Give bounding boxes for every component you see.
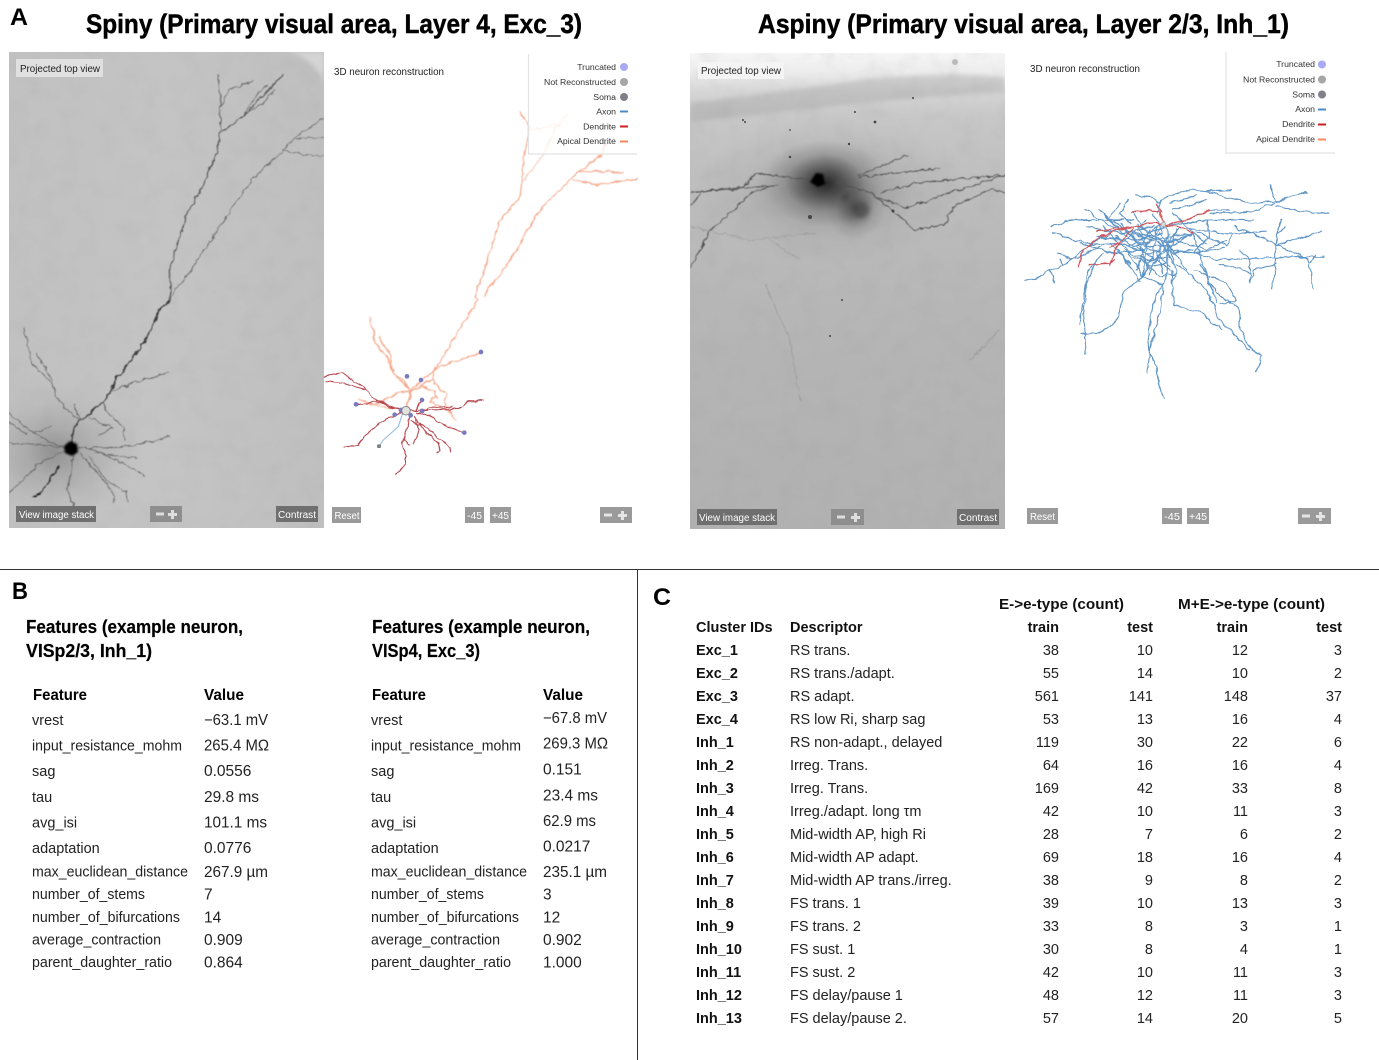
table rows: 3 [1334, 896, 1342, 912]
table: Exc_3 features: avg_isi [371, 816, 416, 832]
legend: Dendrite [583, 122, 616, 132]
table rows: 42 [1043, 965, 1059, 981]
legend: Not Reconstructed [1243, 74, 1315, 84]
table rows: 8 [1145, 942, 1153, 958]
table: Inh_1 features: −63.1 mV [204, 712, 269, 729]
panel: aspiny 3D reconstruction [1024, 52, 1335, 524]
table: Inh_1 features: vrest [32, 713, 63, 729]
table rows [696, 643, 1342, 1027]
panel label C: C [653, 584, 671, 611]
table: Exc_3 features: 235.1 µm [543, 864, 607, 881]
table rows: 33 [1043, 919, 1059, 935]
table rows: 28 [1043, 827, 1059, 843]
table rows: 20 [1232, 1011, 1248, 1027]
panel: spiny 3D reconstruction [324, 53, 638, 523]
table: Exc_3 features: 12 [543, 910, 560, 926]
button: view image stack: View image stack [19, 510, 95, 521]
table rows: Inh_13 [696, 1011, 742, 1027]
table rows: 30 [1137, 735, 1153, 751]
table rows: 11 [1233, 965, 1248, 981]
column headers [696, 620, 1342, 636]
table: Exc_3 features: sag [371, 764, 394, 780]
button: rotate +45: +45 [492, 511, 509, 522]
table rows: 14 [1137, 666, 1153, 682]
panel C: cluster count table [653, 584, 1342, 1027]
table: Inh_1 features: 0.909 [204, 932, 243, 949]
legend [528, 53, 637, 154]
table rows: FS sust. 2 [790, 965, 855, 981]
table: Inh_1 features: 14 [204, 910, 222, 926]
button: rotate -45: -45 [467, 511, 482, 522]
table: Exc_3 features: max_euclidean_distance [371, 864, 527, 880]
legend: Apical Dendrite [557, 136, 616, 146]
table rows: 22 [1232, 735, 1248, 751]
table: Exc_3 features: 0.0217 [543, 838, 590, 856]
table rows: 561 [1035, 689, 1059, 705]
caption: 3D reconstruction: 3D neuron reconstruction [334, 67, 444, 78]
table: Exc_3 features: Value [543, 687, 583, 704]
table: Inh_1 features: number_of_bifurcations [32, 910, 180, 926]
table rows: 11 [1233, 804, 1248, 820]
button: rotate -45 [465, 507, 484, 523]
divider: horizontal [0, 569, 1379, 570]
table rows: 4 [1334, 758, 1342, 774]
caption: 3D reconstruction: 3D neuron reconstruction [1030, 64, 1140, 75]
legend: Not Reconstructed [544, 77, 616, 87]
button: contrast [957, 509, 999, 525]
table rows: Irreg. Trans. [790, 781, 868, 797]
label: projected top view: Projected top view [20, 64, 101, 75]
table rows: RS trans. [790, 643, 850, 659]
table rows: FS delay/pause 2. [790, 1011, 907, 1027]
table: Inh_1 features: number_of_stems [32, 887, 145, 903]
table rows: 8 [1145, 919, 1153, 935]
button: zoom [1298, 508, 1331, 524]
table rows: 141 [1129, 689, 1153, 705]
table rows: Inh_12 [696, 988, 742, 1004]
table rows: 16 [1232, 712, 1248, 728]
table rows: 10 [1137, 804, 1153, 820]
table: Inh_1 features: avg_isi [32, 816, 77, 832]
table rows: 33 [1232, 781, 1248, 797]
table rows: 3 [1334, 804, 1342, 820]
table rows: Inh_3 [696, 781, 734, 797]
table rows: 119 [1036, 735, 1059, 751]
button: reset: Reset [334, 511, 360, 522]
divider: vertical [637, 569, 638, 1060]
table: Exc_3 features: 3 [543, 886, 552, 904]
table rows: Irreg./adapt. long τm [790, 804, 921, 820]
table rows: 55 [1043, 666, 1059, 682]
table rows: 2 [1334, 873, 1342, 889]
table rows: Inh_10 [696, 942, 742, 958]
table rows: 8 [1334, 781, 1342, 797]
table rows: Inh_1 [696, 735, 734, 751]
truncation points [354, 350, 483, 435]
table: Exc_3 features: 62.9 ms [543, 813, 596, 830]
table rows: 148 [1224, 689, 1248, 705]
table rows: 4 [1334, 712, 1342, 728]
table rows: 7 [1145, 827, 1153, 843]
table: Inh_1 features: input_resistance_mohm [32, 738, 182, 754]
table: Inh_1 features [32, 687, 269, 972]
button: zoom [831, 509, 864, 525]
column headers: Cluster IDs [696, 620, 773, 636]
button: view image stack: View image stack [699, 513, 776, 524]
table rows: 57 [1043, 1011, 1059, 1027]
group header: M+E to e-type: M+E->e-type (count) [1178, 597, 1325, 613]
table: Inh_1 features: tau [32, 790, 52, 806]
axon arbor [1024, 185, 1328, 399]
table rows: 3 [1334, 965, 1342, 981]
table: Exc_3 features: parent_daughter_ratio [371, 955, 511, 971]
table rows: Mid-width AP adapt. [790, 850, 919, 866]
table: Exc_3 features: average_contraction [371, 932, 500, 948]
panel: spiny projected top view [0, 52, 324, 528]
table: Exc_3 features: adaptation [371, 841, 439, 857]
button: contrast [276, 506, 318, 522]
table rows: FS trans. 2 [790, 919, 861, 935]
table rows: Mid-width AP, high Ri [790, 827, 926, 843]
button: reset: Reset [1030, 512, 1055, 523]
table rows: 3 [1334, 988, 1342, 1004]
group header: E to e-type: E->e-type (count) [999, 597, 1124, 613]
table: Inh_1 features: 265.4 MΩ [204, 738, 269, 754]
heading: Inh_1 features [26, 616, 243, 661]
table: Exc_3 features: 23.4 ms [543, 788, 598, 804]
table: Inh_1 features: average_contraction [32, 932, 161, 948]
button: view image stack [16, 506, 96, 522]
table: Exc_3 features: 269.3 MΩ [543, 736, 608, 752]
table: Inh_1 features: 101.1 ms [204, 814, 267, 832]
table rows: Inh_8 [696, 896, 734, 912]
table: Exc_3 features: −67.8 mV [543, 710, 608, 727]
column headers: train [1028, 620, 1059, 636]
table rows: 2 [1334, 666, 1342, 682]
button: rotate +45 [1187, 508, 1209, 524]
table: Inh_1 features: Value [204, 687, 244, 704]
label: projected top view [16, 59, 103, 77]
table rows: 10 [1232, 666, 1248, 682]
button: zoom [600, 507, 632, 523]
button: rotate +45: +45 [1189, 512, 1207, 523]
legend: Truncated [577, 62, 616, 72]
table: Inh_1 features: parent_daughter_ratio [32, 955, 172, 971]
table rows: 42 [1137, 781, 1153, 797]
table: Inh_1 features: sag [32, 764, 55, 780]
table rows: RS low Ri, sharp sag [790, 712, 925, 728]
table: Inh_1 features: 7 [204, 886, 213, 904]
table: Inh_1 features: 29.8 ms [204, 789, 259, 806]
table rows: RS non-adapt., delayed [790, 735, 942, 751]
table rows: 53 [1043, 712, 1059, 728]
table: Exc_3 features [371, 687, 608, 972]
table rows: 42 [1043, 804, 1059, 820]
table rows: Inh_6 [696, 850, 734, 866]
table rows: RS trans./adapt. [790, 666, 895, 682]
table: Exc_3 features: 1.000 [543, 954, 582, 972]
table: Inh_1 features: 0.0556 [204, 763, 251, 780]
table: Inh_1 features: max_euclidean_distance [32, 864, 188, 880]
table: Exc_3 features: tau [371, 790, 391, 806]
table rows: 2 [1334, 827, 1342, 843]
aspiny neuron micrograph [691, 155, 1005, 400]
table rows: 16 [1137, 758, 1153, 774]
soma [810, 173, 825, 187]
button: rotate -45 [1162, 508, 1182, 524]
table rows: FS delay/pause 1 [790, 988, 903, 1004]
table rows: 13 [1232, 896, 1248, 912]
basal dendrites and axon [324, 350, 483, 474]
column headers: test [1316, 620, 1342, 636]
table rows: 8 [1240, 873, 1248, 889]
spiny neuron micrograph [9, 75, 324, 510]
table rows: FS trans. 1 [790, 896, 861, 912]
table rows: 9 [1145, 873, 1153, 889]
table: Exc_3 features: input_resistance_mohm [371, 738, 521, 754]
heading: Inh_1 features: VISp2/3, Inh_1) [26, 640, 152, 661]
table rows: 1 [1334, 942, 1342, 958]
table rows: 4 [1334, 850, 1342, 866]
legend: Axon [1295, 104, 1315, 114]
legend: Axon [596, 106, 616, 116]
button: view image stack [697, 509, 777, 525]
table: Inh_1 features: adaptation [32, 841, 100, 857]
column headers: Descriptor [790, 620, 863, 636]
table rows: 12 [1232, 643, 1248, 659]
table rows: 16 [1232, 758, 1248, 774]
table rows: 69 [1043, 850, 1059, 866]
legend: Apical Dendrite [1256, 134, 1315, 144]
title: aspiny neuron: Aspiny (Primary visual area, Layer 2/3, Inh_1) [758, 9, 1289, 39]
table rows: Exc_3 [696, 689, 738, 705]
table rows: 48 [1043, 988, 1059, 1004]
column headers: test [1127, 620, 1153, 636]
table rows: Exc_1 [696, 643, 738, 659]
table: Exc_3 features: vrest [371, 713, 402, 729]
table rows: 10 [1137, 896, 1153, 912]
table rows: RS adapt. [790, 689, 854, 705]
table rows: 169 [1035, 781, 1059, 797]
panel label A: A [10, 4, 28, 31]
heading: Exc_3 features: Features (example neuron, [372, 616, 590, 637]
title: spiny neuron: Spiny (Primary visual area, Layer 4, Exc_3) [86, 9, 582, 39]
table rows: 1 [1334, 919, 1342, 935]
table: Exc_3 features: number_of_bifurcations [371, 910, 519, 926]
table: Exc_3 features: number_of_stems [371, 887, 484, 903]
label: projected top view [698, 62, 784, 79]
table rows: 10 [1137, 643, 1153, 659]
panel label B: B [12, 578, 28, 605]
table rows: Exc_4 [696, 712, 738, 728]
table rows: 13 [1137, 712, 1153, 728]
button: reset [332, 507, 361, 523]
table rows: 11 [1233, 988, 1248, 1004]
label: projected top view: Projected top view [701, 66, 782, 77]
table: Exc_3 features: 0.151 [543, 762, 582, 778]
legend: Soma [1292, 90, 1315, 100]
scattered puncta [742, 59, 958, 337]
heading: Exc_3 features: VISp4, Exc_3) [372, 640, 480, 661]
button: contrast: Contrast [278, 510, 316, 521]
table rows: 37 [1326, 689, 1342, 705]
panel B: feature tables [12, 578, 608, 972]
button: zoom [150, 506, 182, 522]
table rows: 3 [1334, 643, 1342, 659]
table: Inh_1 features: 0.864 [204, 954, 243, 972]
table: Inh_1 features: 267.9 µm [204, 864, 268, 881]
panel: aspiny projected top view [690, 53, 1005, 529]
table rows: Inh_9 [696, 919, 734, 935]
column headers: train [1217, 620, 1248, 636]
table rows: 14 [1137, 1011, 1153, 1027]
apical dendrites [359, 112, 638, 419]
table rows: 6 [1334, 735, 1342, 751]
dendrites [1078, 203, 1210, 267]
soma [64, 441, 78, 456]
table: Inh_1 features: 0.0776 [204, 840, 251, 857]
button: reset [1027, 508, 1058, 524]
button: rotate +45 [490, 507, 511, 523]
table rows: 12 [1137, 988, 1153, 1004]
table: Exc_3 features: 0.902 [543, 932, 582, 949]
table rows: 30 [1043, 942, 1059, 958]
table rows: 3 [1240, 919, 1248, 935]
table rows: 38 [1043, 873, 1059, 889]
legend: Dendrite [1282, 119, 1315, 129]
table rows: 38 [1043, 643, 1059, 659]
button: rotate -45: -45 [1164, 512, 1180, 523]
legend: Soma [593, 92, 616, 102]
table rows: Inh_2 [696, 758, 734, 774]
table rows: Inh_4 [696, 804, 734, 820]
table rows: 39 [1043, 896, 1059, 912]
table rows: 4 [1240, 942, 1248, 958]
heading: Exc_3 features [372, 616, 590, 661]
table: Exc_3 features: Feature [372, 687, 426, 704]
table rows: 6 [1240, 827, 1248, 843]
table rows: 64 [1043, 758, 1059, 774]
table rows: Inh_7 [696, 873, 734, 889]
table rows: Irreg. Trans. [790, 758, 868, 774]
heading: Inh_1 features: Features (example neuron, [26, 616, 243, 637]
table rows: Exc_2 [696, 666, 738, 682]
table: Inh_1 features: Feature [33, 687, 87, 704]
table rows: FS sust. 1 [790, 942, 855, 958]
legend [1226, 52, 1335, 153]
table rows: Inh_11 [696, 965, 741, 981]
button: contrast: Contrast [959, 513, 997, 524]
legend: Truncated [1276, 59, 1315, 69]
table rows: 18 [1137, 850, 1153, 866]
table rows: Mid-width AP trans./irreg. [790, 873, 952, 889]
table rows: 10 [1137, 965, 1153, 981]
table rows: 16 [1232, 850, 1248, 866]
table rows: Inh_5 [696, 827, 734, 843]
table rows: 5 [1334, 1011, 1342, 1027]
